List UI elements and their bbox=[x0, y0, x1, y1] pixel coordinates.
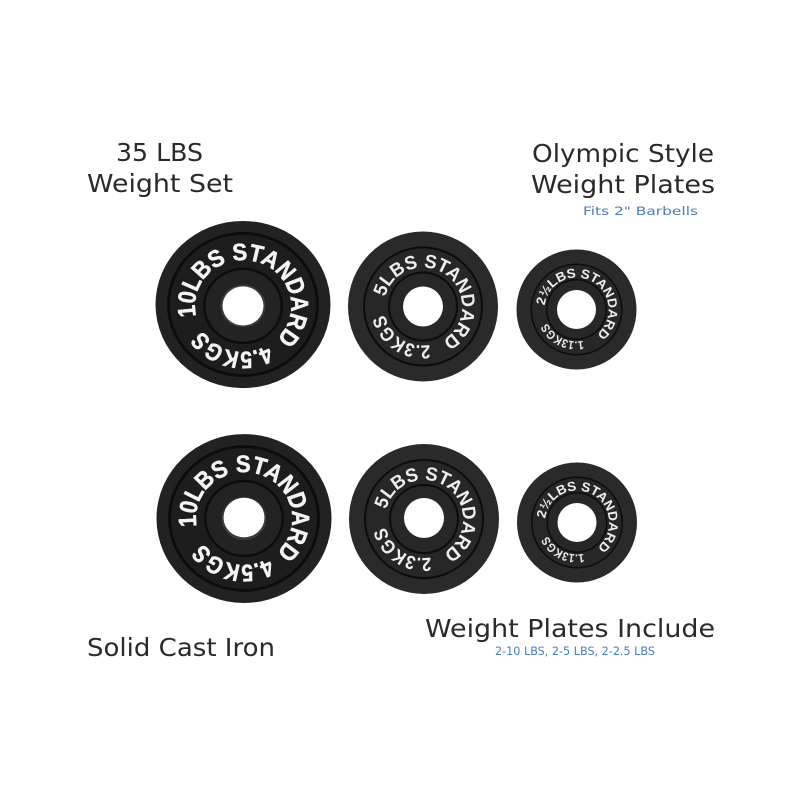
heading: 35 LBS Weight Set bbox=[87, 138, 233, 198]
plate: 2.5 lbs bottom: 1.13KGS bbox=[542, 537, 584, 562]
heading: Olympic Style Weight Plates bbox=[531, 139, 715, 199]
caption: fits 2 inch barbells: Fits 2" Barbells bbox=[583, 204, 698, 218]
plate: 10 lbs top bbox=[156, 221, 330, 388]
plate: 5 lbs top: 5LBS STANDARD bbox=[373, 254, 475, 348]
plate: 2.5 lbs bottom bbox=[517, 462, 637, 582]
heading: Solid Cast Iron: Solid Cast Iron bbox=[87, 633, 275, 662]
heading: Weight Plates Include: Weight Plates Include bbox=[425, 614, 715, 643]
heading: Olympic Style Weight Plates: Olympic Style bbox=[532, 139, 714, 168]
plate: 5 lbs top bbox=[348, 232, 498, 382]
plate: 2.5 lbs bottom: 2½LBS STANDARD bbox=[536, 482, 618, 552]
plate: 5 lbs bottom bbox=[349, 444, 499, 594]
heading: 35 LBS Weight Set: 35 LBS bbox=[116, 138, 203, 167]
plate: 2.5 lbs top bbox=[516, 250, 636, 370]
plate: 2.5 lbs top: 2½LBS STANDARD bbox=[536, 268, 618, 339]
caption: plate quantities: 2-10 LBS, 2-5 LBS, 2-2.5 LBS bbox=[495, 644, 655, 658]
plate: 10 lbs bottom: 4.5KGS bbox=[192, 546, 272, 582]
heading: 35 LBS Weight Set: Weight Set bbox=[87, 169, 233, 198]
plate: 2.5 lbs top: 1.13KGS bbox=[541, 324, 584, 350]
plate: 5 lbs bottom: 5LBS STANDARD bbox=[374, 467, 476, 561]
heading: Olympic Style Weight Plates: Weight Plates bbox=[531, 170, 715, 199]
plate: 5 lbs bottom: 2.3KGS bbox=[374, 528, 431, 572]
plate: 10 lbs bottom bbox=[156, 434, 332, 603]
plate: 10 lbs bottom: 10LBS STANDARD bbox=[178, 455, 310, 560]
plate: 10 lbs top: 10LBS STANDARD bbox=[178, 243, 308, 346]
plate: 10 lbs top: 4.5KGS bbox=[191, 333, 270, 369]
plate: 5 lbs top: 2.3KGS bbox=[373, 316, 430, 359]
